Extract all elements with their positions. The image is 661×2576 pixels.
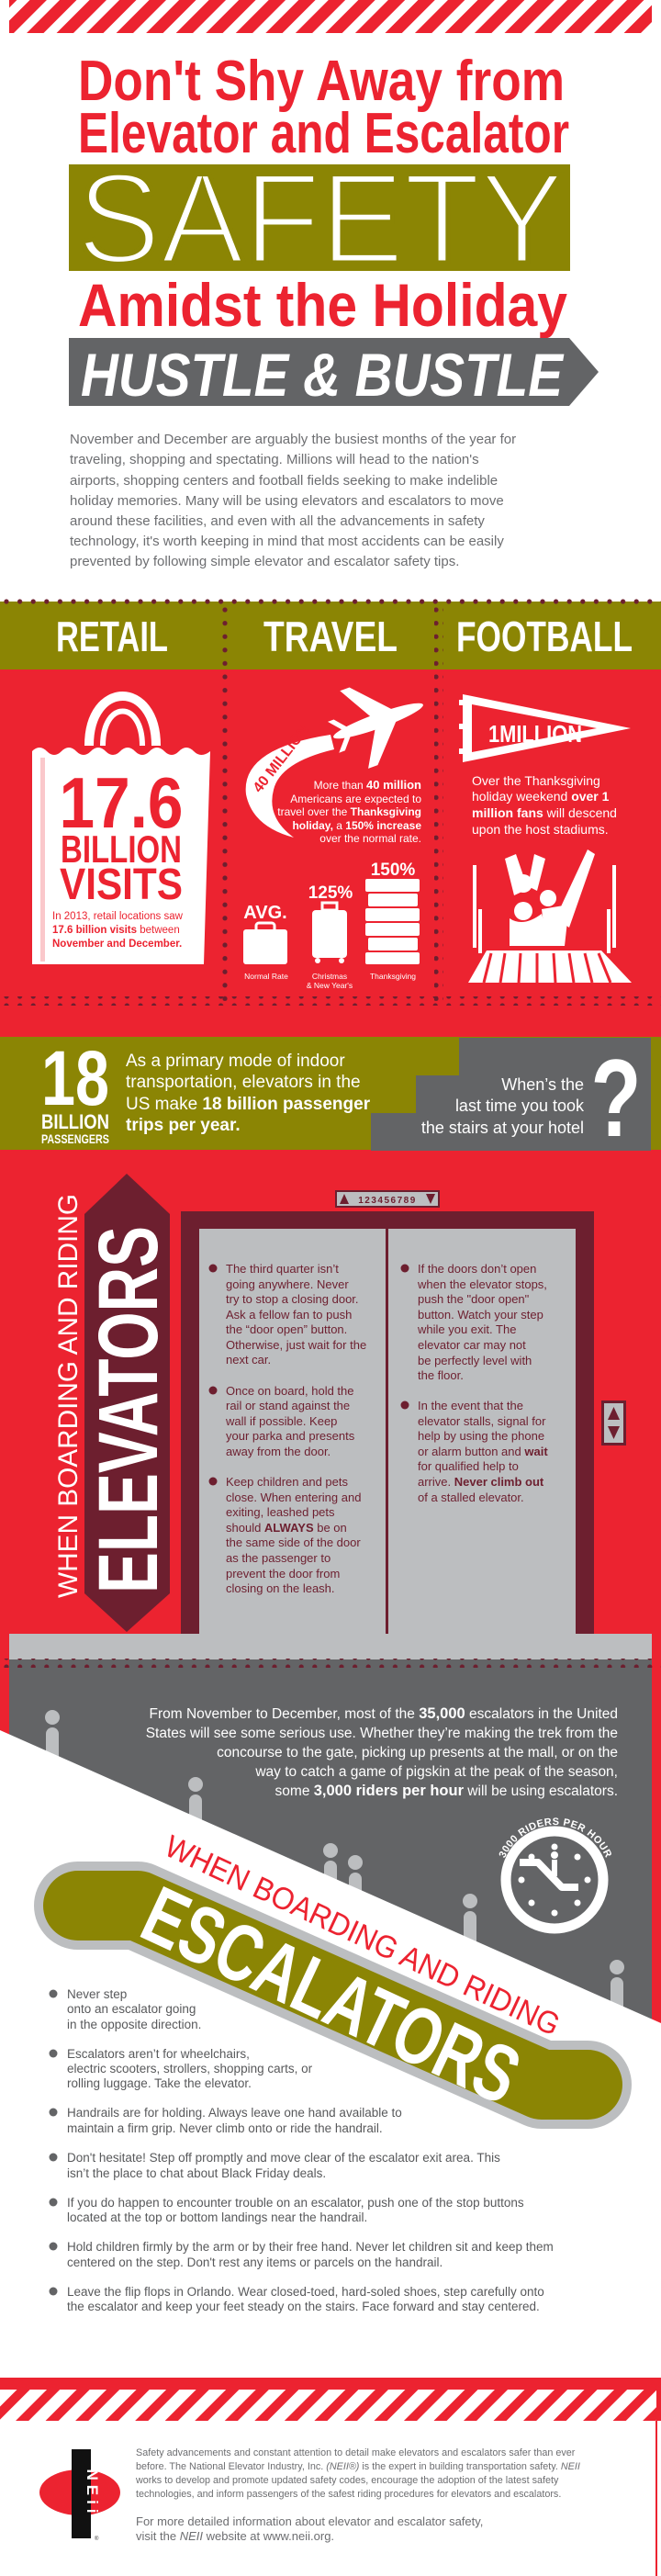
- panel: retail: 17.6: [59, 762, 184, 843]
- title: [69, 50, 599, 409]
- callout: stairs question: When’s the: [501, 1075, 584, 1094]
- icon: clock: [499, 1817, 611, 1934]
- intro paragraph: November and December are arguably the busiest months of the year for: [70, 432, 516, 447]
- icon: stadium fans: [468, 849, 632, 983]
- stats band: 18 billion passengers: trips per year.: [126, 1116, 241, 1135]
- panel: football: [459, 694, 632, 983]
- chart: luggage comparison: AVG.: [243, 903, 287, 923]
- elevator doors: of a stalled elevator.: [418, 1490, 524, 1504]
- panel: football: Over the Thanksgiving: [472, 773, 600, 788]
- panel: escalator stats: States will see some serious use. Whether they’re making the trek from the: [146, 1726, 618, 1741]
- category header band: [0, 598, 661, 669]
- elevator doors: away from the door.: [226, 1445, 330, 1458]
- elevator doors: exiting, leashed pets: [226, 1505, 335, 1519]
- logo: NEII: NEii: [84, 2469, 101, 2518]
- elevator doors: as the passenger to: [226, 1551, 330, 1565]
- floor: [9, 1634, 652, 1659]
- elevator doors: going anywhere. Never: [226, 1277, 349, 1291]
- panel: travel: More than 40 million: [314, 778, 421, 792]
- elevator doors: while you exit. The: [417, 1322, 516, 1336]
- escalator safety tips: in the opposite direction.: [67, 2018, 201, 2031]
- elevator doors: try to stop a closing door.: [226, 1292, 359, 1306]
- escalator safety tips: If you do happen to encounter trouble on an escalator, push one of the stop buttons: [67, 2196, 524, 2210]
- heading tag: elevators: ELEVATORS: [82, 1226, 175, 1593]
- elevator doors: rail or stand against the: [226, 1399, 350, 1412]
- escalator safety tips: rolling luggage. Take the elevator.: [67, 2076, 252, 2090]
- footer text: For more detailed information about elevator and escalator safety,: [136, 2514, 483, 2528]
- logo: NEII: ®: [95, 2536, 99, 2542]
- elevator doors: the same side of the door: [226, 1535, 361, 1549]
- elevator doors: button. Watch your step: [418, 1308, 543, 1322]
- panel: escalator stats: concourse to the gate, picking up presents at the mall, or on the: [217, 1745, 618, 1760]
- icon: airplane: [319, 666, 437, 776]
- panel: retail: In 2013, retail locations saw: [52, 911, 184, 922]
- footer text: technologies, and inform passengers of the safest riding procedures for elevators and escalators.: [136, 2489, 561, 2500]
- icon: call buttons: [601, 1400, 626, 1445]
- elevator doors: the “door open” button.: [226, 1322, 347, 1336]
- elevator doors: or alarm button and wait: [418, 1445, 548, 1458]
- escalator safety tips: Handrails are for holding. Always leave one hand available to: [67, 2106, 402, 2120]
- intro paragraph: traveling, shopping and spectating. Millions will head to the nation's: [70, 452, 479, 467]
- logo: NEII: [39, 2449, 120, 2542]
- chart: luggage comparison: Thanksgiving: [370, 972, 416, 981]
- panel: escalator stats: [4, 1659, 661, 2019]
- escalator safety tips: Hold children firmly by the arm or by their free hand. Never let children sit and keep them: [67, 2240, 554, 2254]
- icon: pennant: [459, 694, 631, 762]
- intro paragraph: [70, 432, 516, 569]
- panel: travel: travel over the Thanksgiving: [277, 805, 421, 818]
- escalator safety tips: isn’t the place to chat about Black Friday deals.: [67, 2166, 326, 2180]
- background red for middle sections: [0, 602, 661, 2026]
- elevator doors: In the event that the: [418, 1399, 523, 1412]
- heading: escalators: WHEN BOARDING AND RIDING: [160, 1828, 566, 2043]
- intro paragraph: holiday memories. Many will be using elevators and escalators to move: [70, 493, 504, 509]
- elevator doors: [181, 1211, 594, 1634]
- elevator doors: be perfectly level with: [418, 1354, 532, 1367]
- icon: clock: 3000 RIDERS PER HOUR: [499, 1817, 611, 1858]
- stats band: 18 billion passengers: [0, 1035, 661, 1160]
- stats band: 18 billion passengers: US make 18 billion passenger: [126, 1095, 371, 1114]
- chart: luggage comparison: Christmas: [312, 972, 347, 981]
- floor indicator: [335, 1190, 440, 1208]
- footer text: Safety advancements and constant attention to detail make elevators and escalators safer than ever: [136, 2447, 576, 2458]
- footer text: [135, 2447, 580, 2543]
- panel: retail: 17.6 billion visits between: [52, 925, 180, 936]
- icons: people: [45, 1710, 624, 2023]
- panel: travel: holiday, a 150% increase: [292, 819, 421, 832]
- elevator doors: The third quarter isn’t: [226, 1262, 339, 1276]
- elevator doors: prevent the door from: [226, 1567, 340, 1580]
- footer text: visit the NEII website at www.neii.org.: [136, 2529, 334, 2543]
- intro paragraph: technology, it's worth keeping in mind that most accidents can be easily: [70, 534, 504, 549]
- stats band: 18 billion passengers: transportation, elevators in the: [126, 1073, 361, 1092]
- panel: travel: Americans are expected to: [290, 793, 421, 805]
- escalator safety tips: Leave the flip flops in Orlando. Wear closed-toed, hard-soled shoes, step carefully onto: [67, 2285, 544, 2299]
- panel: travel: over the normal rate.: [319, 832, 421, 845]
- swoosh: [246, 735, 334, 838]
- heading tag: elevators: WHEN BOARDING AND RIDING: [53, 1194, 84, 1598]
- intro paragraph: airports, shopping centers and football fields seeking to make indelible: [70, 473, 498, 489]
- category header band: TRAVEL: [263, 613, 398, 660]
- panel: retail: [32, 696, 210, 964]
- panel: football: upon the host stadiums.: [472, 822, 609, 837]
- elevator doors: close. When entering and: [226, 1490, 361, 1504]
- elevator doors: push the "door open": [418, 1292, 530, 1306]
- chart: luggage comparison: 150%: [371, 861, 415, 880]
- elevator doors: Once on board, hold the: [226, 1384, 354, 1398]
- top stripe band: [9, 0, 652, 33]
- escalator safety tips: Don't hesitate! Step off promptly and move clear of the escalator exit area. This: [67, 2151, 500, 2165]
- panel: escalator stats: From November to December, most of the 35,000 escalators in the United: [149, 1705, 618, 1722]
- elevator doors: should ALWAYS be on: [226, 1521, 347, 1535]
- panel: travel: 40 MILLION: [251, 723, 312, 795]
- white diagonal escalator area: [0, 1730, 661, 2378]
- floor indicator: 123456789: [358, 1196, 417, 1206]
- panel: retail: BILLION: [61, 827, 182, 871]
- elevator doors: arrive. Never climb out: [418, 1475, 544, 1489]
- callout: stairs question: [371, 1037, 651, 1160]
- chart: luggage comparison: Normal Rate: [244, 972, 288, 981]
- footer text: works to develop and promote updated safety codes, encourage the adoption of the latest safety: [135, 2475, 559, 2486]
- escalator safety tips: electric scooters, strollers, shopping carts, or: [67, 2062, 313, 2075]
- elevator doors: closing on the leash.: [226, 1581, 335, 1595]
- title: Don't Shy Away from: [78, 50, 565, 113]
- callout: stairs question: the stairs at your hotel: [421, 1119, 584, 1137]
- elevator doors: Otherwise, just wait for the: [226, 1338, 366, 1352]
- escalator safety tips: [50, 1987, 554, 2313]
- elevator doors: your parka and presents: [226, 1429, 355, 1443]
- footer stripe band: [0, 2378, 661, 2576]
- icon: shopping bag: [32, 696, 210, 964]
- elevator doors: elevator stalls, signal for: [418, 1414, 546, 1428]
- elevator doors: Ask a fellow fan to push: [226, 1308, 352, 1322]
- panel: escalator stats: way to catch a game of pigskin at the peak of the season,: [254, 1764, 618, 1780]
- chart: luggage comparison: & New Year's: [307, 981, 353, 990]
- panel: retail: VISITS: [60, 861, 183, 909]
- escalator safety tips: Escalators aren’t for wheelchairs,: [67, 2047, 250, 2061]
- elevator doors: help by using the phone: [418, 1429, 544, 1443]
- heading tag: elevators: [53, 1174, 175, 1632]
- elevator doors: If the doors don’t open: [418, 1262, 536, 1276]
- stats band: 18 billion passengers: BILLION: [41, 1110, 109, 1133]
- title: HUSTLE & BUSTLE: [81, 341, 565, 409]
- elevator doors: wall if possible. Keep: [225, 1414, 337, 1428]
- escalator safety tips: located at the top or bottom landings near the handrail.: [67, 2210, 367, 2224]
- callout: stairs question: last time you took: [455, 1097, 585, 1115]
- elevator doors: next car.: [226, 1353, 271, 1367]
- stats band: 18 billion passengers: 18: [41, 1035, 109, 1121]
- heading: escalators: ESCALATORS: [129, 1869, 533, 2121]
- chart: luggage comparison: 125%: [308, 883, 353, 903]
- panel: football: holiday weekend over 1: [472, 789, 610, 804]
- panel: football: million fans will descend: [472, 805, 617, 820]
- footer text: before. The National Elevator Industry, Inc. (NEII®) is the expert in building transportation safety. NEII: [136, 2461, 580, 2472]
- elevator doors: Keep children and pets: [226, 1475, 348, 1489]
- stats band: 18 billion passengers: As a primary mode of indoor: [126, 1052, 345, 1071]
- intro paragraph: around these facilities, and even with all the advancements in safety: [70, 513, 485, 529]
- elevator doors: for qualified help to: [418, 1459, 519, 1473]
- panel: travel: [243, 666, 437, 990]
- escalator safety tips: maintain a firm grip. Never climb onto or ride the handrail.: [67, 2121, 383, 2135]
- escalator safety tips: onto an escalator going: [67, 2002, 196, 2016]
- title: Amidst the Holiday: [78, 271, 567, 339]
- category header band: RETAIL: [56, 613, 168, 660]
- escalator safety tips: the escalator and keep your feet steady on the stairs. Face forward and stay centered.: [67, 2300, 540, 2313]
- stats band: 18 billion passengers: PASSENGERS: [41, 1131, 109, 1146]
- escalator safety tips: Never step: [67, 1987, 127, 2001]
- icon: pennant: 1MILLION: [488, 720, 582, 748]
- callout: stairs question: ?: [591, 1037, 641, 1160]
- panel: escalator stats: some 3,000 riders per hour will be using escalators.: [275, 1783, 618, 1799]
- chart: luggage comparison: [243, 861, 420, 990]
- intro paragraph: prevented by following simple elevator and escalator safety tips.: [70, 554, 459, 569]
- heading: escalators: [78, 1828, 588, 2121]
- elevator doors: the floor.: [418, 1368, 464, 1382]
- elevator doors: when the elevator stops,: [417, 1277, 547, 1291]
- title: SAFETY: [77, 146, 564, 290]
- escalator safety tips: centered on the step. Don't rest any items or parcels on the handrail.: [67, 2255, 443, 2269]
- elevator doors: elevator car may not: [418, 1338, 526, 1352]
- panel: elevators: [53, 1174, 626, 1634]
- panel: retail: November and December.: [52, 939, 182, 950]
